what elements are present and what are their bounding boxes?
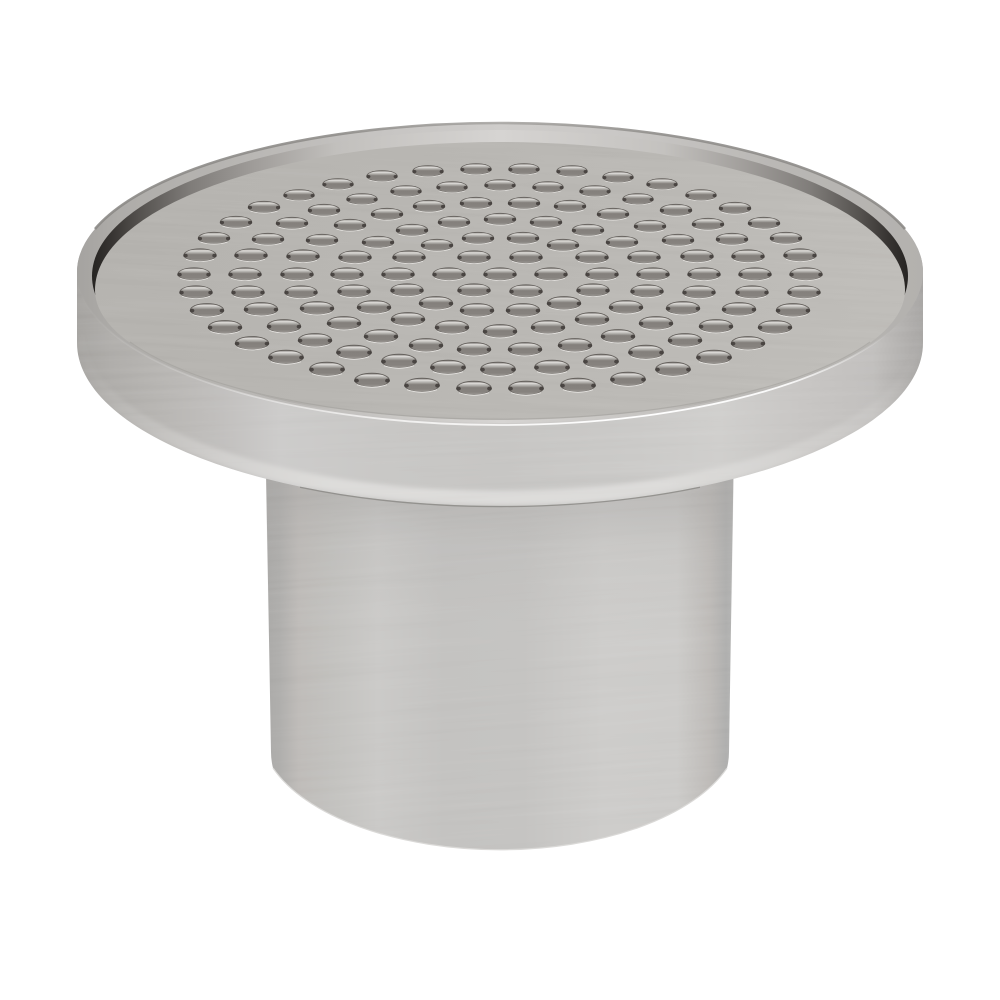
front rim highlight	[77, 272, 923, 425]
drainage holes	[177, 163, 823, 395]
hole ring 4	[280, 197, 721, 356]
perforated plate	[95, 142, 905, 420]
hole ring 2	[381, 232, 619, 317]
top rim face	[77, 123, 923, 425]
lower cylindrical body	[266, 478, 734, 850]
product illustration: round perforated drain	[77, 122, 923, 850]
hole ring 3	[330, 213, 670, 338]
hole ring 5	[228, 179, 772, 376]
inner recess wall	[92, 130, 908, 423]
hole ring 6	[177, 163, 823, 395]
hole ring 1 and centre hole	[432, 250, 568, 298]
circular flange side wall	[77, 229, 923, 508]
far rim outer edge	[95, 123, 905, 229]
